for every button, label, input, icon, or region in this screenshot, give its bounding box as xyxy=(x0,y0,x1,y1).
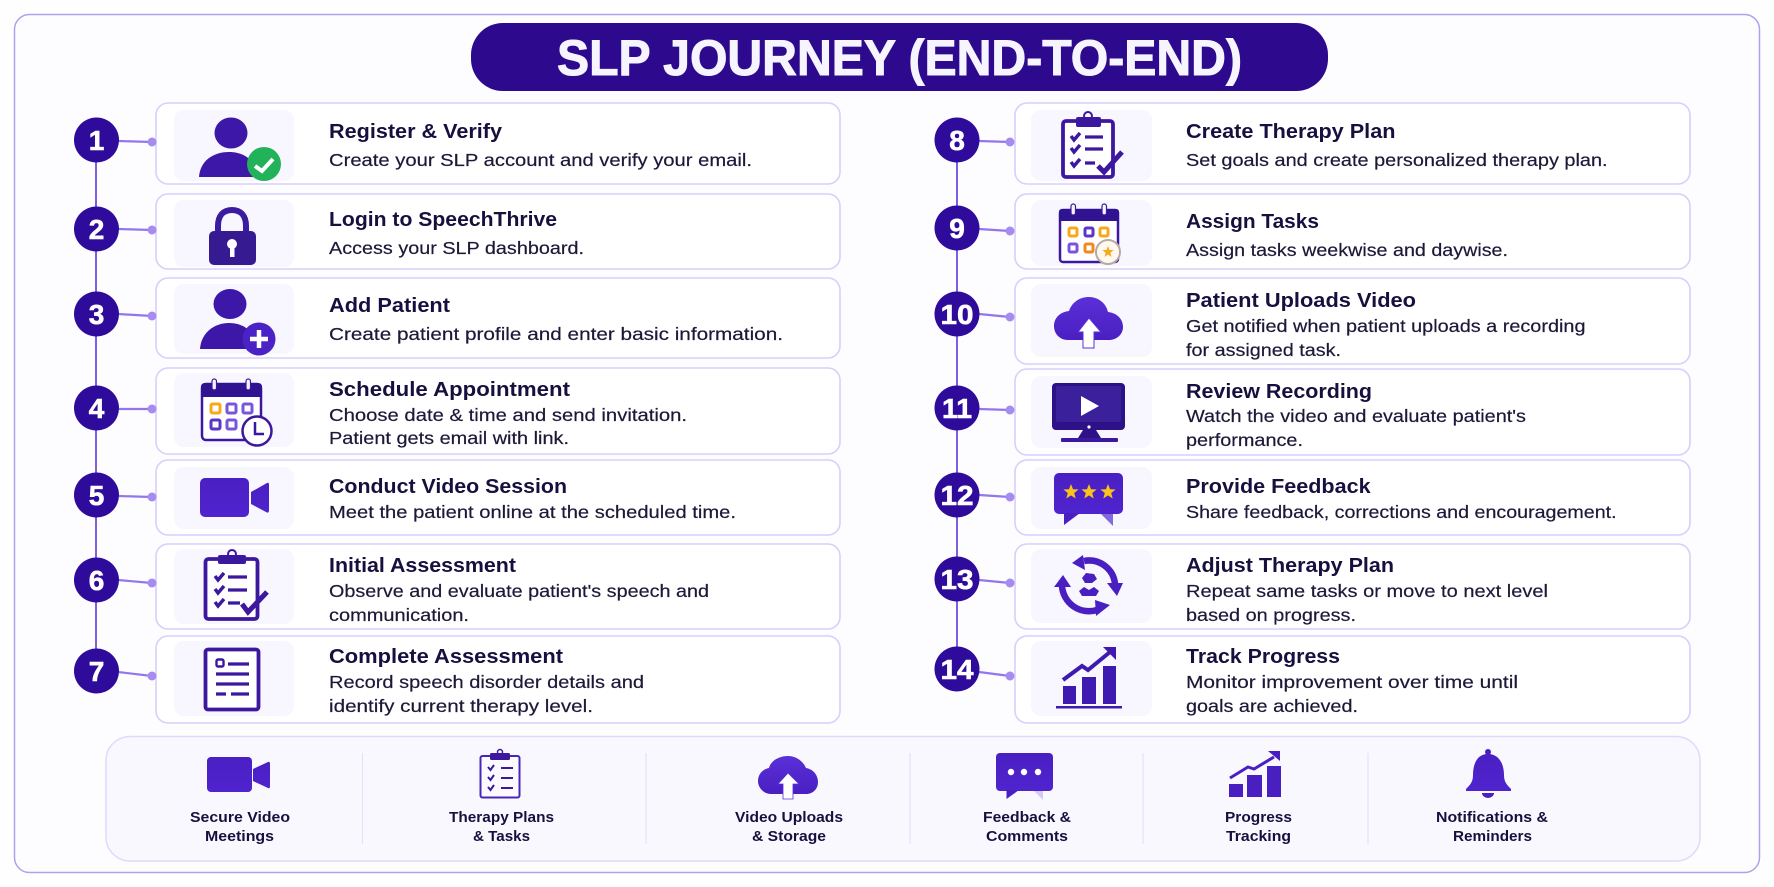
step 11: review recording: 11 xyxy=(942,393,972,424)
step 10: patient uploads video: 10 xyxy=(940,299,974,330)
icon: clipboard checklist xyxy=(206,550,267,619)
step 4: schedule appointment: Patient gets email with link. xyxy=(329,428,569,448)
step 2: login: 2 xyxy=(89,214,104,245)
step 6: initial assessment xyxy=(74,544,840,629)
step 13: adjust therapy plan: based on progress. xyxy=(1186,605,1356,625)
feature: therapy plans and tasks: & Tasks xyxy=(473,829,530,845)
step 12: provide feedback: Provide Feedback xyxy=(1186,476,1372,498)
feature: progress tracking: Tracking xyxy=(1226,829,1291,845)
step 9: assign tasks: 9 xyxy=(949,213,965,244)
feature: notifications and reminders xyxy=(1436,749,1549,845)
step 10: patient uploads video: Get notified when patient uploads a recording xyxy=(1186,316,1586,336)
step 2: login: Login to SpeechThrive xyxy=(329,209,557,231)
step 3: add patient: Create patient profile and enter basic information. xyxy=(329,324,783,344)
step 9: assign tasks xyxy=(934,194,1690,269)
step 13: adjust therapy plan: Repeat same tasks or move to next level xyxy=(1186,581,1548,601)
feature: progress tracking xyxy=(1225,751,1292,845)
step 1: register and verify xyxy=(74,103,840,184)
feature: video uploads and storage xyxy=(735,756,843,845)
icon: monitor play xyxy=(1052,383,1125,442)
icon: growth chart xyxy=(1056,647,1122,708)
step 8: create therapy plan: Set goals and create personalized therapy plan. xyxy=(1186,150,1608,170)
step 13: adjust therapy plan: 13 xyxy=(940,564,974,595)
step 3: add patient: 3 xyxy=(89,299,104,330)
step 4: schedule appointment: Choose date & time and send invitation. xyxy=(329,405,687,425)
step 1: register and verify: Create your SLP account and verify your email. xyxy=(329,150,752,170)
step 11: review recording: Watch the video and evaluate patient's xyxy=(1186,406,1526,426)
timeline: right spine xyxy=(956,140,958,669)
step 12: provide feedback xyxy=(934,460,1690,535)
step 10: patient uploads video: Patient Uploads Video xyxy=(1186,290,1416,312)
step 13: adjust therapy plan: Adjust Therapy Plan xyxy=(1186,555,1394,577)
icon: calendar with star xyxy=(1059,204,1120,264)
icon: clipboard checklist xyxy=(1063,112,1122,177)
feature: video uploads and storage: Video Uploads xyxy=(735,810,843,826)
step 13: adjust therapy plan xyxy=(934,544,1690,629)
step 8: create therapy plan: Create Therapy Plan xyxy=(1186,121,1396,143)
step 5: conduct video session: Conduct Video Session xyxy=(329,476,567,498)
panel: platform features xyxy=(106,736,1700,861)
step 7: complete assessment: Complete Assessment xyxy=(329,646,563,668)
feature: notifications and reminders: Reminders xyxy=(1453,829,1532,845)
icon: cycle arrows xyxy=(1054,555,1123,616)
step 11: review recording: performance. xyxy=(1186,430,1303,450)
title: SLP JOURNEY (END-TO-END) xyxy=(557,30,1242,86)
icon: add user xyxy=(200,289,276,356)
step 7: complete assessment: identify current therapy level. xyxy=(329,696,593,716)
icon: padlock xyxy=(209,210,256,265)
step 11: review recording xyxy=(934,369,1690,455)
icon: calendar with clock xyxy=(201,379,272,446)
step 4: schedule appointment xyxy=(74,368,840,454)
feature: feedback and comments: Comments xyxy=(986,829,1068,845)
feature: therapy plans and tasks xyxy=(449,750,554,845)
step 6: initial assessment: Initial Assessment xyxy=(329,555,516,577)
step 8: create therapy plan xyxy=(934,103,1690,184)
feature: video uploads and storage: & Storage xyxy=(752,829,826,845)
step 14: track progress: Monitor improvement over time until xyxy=(1186,672,1518,692)
step 6: initial assessment: communication. xyxy=(329,605,469,625)
step 11: review recording: Review Recording xyxy=(1186,381,1372,403)
feature: feedback and comments xyxy=(983,753,1072,845)
feature: feedback and comments: Feedback & xyxy=(983,810,1072,826)
step 4: schedule appointment: 4 xyxy=(89,393,105,424)
step 10: patient uploads video: for assigned task. xyxy=(1186,340,1341,360)
feature: secure video meetings: Secure Video xyxy=(190,810,290,826)
feature: notifications and reminders: Notifications & xyxy=(1436,810,1549,826)
icon: rating bubble xyxy=(1054,473,1123,526)
step 7: complete assessment: 7 xyxy=(89,656,104,687)
feature: progress tracking: Progress xyxy=(1225,810,1292,826)
feature: secure video meetings xyxy=(190,757,290,845)
step 14: track progress: 14 xyxy=(940,654,974,685)
step 2: login xyxy=(74,194,840,269)
icon: cloud upload xyxy=(1054,297,1123,348)
icon: document xyxy=(206,650,258,710)
step 5: conduct video session: 5 xyxy=(89,480,104,511)
feature: secure video meetings: Meetings xyxy=(205,829,274,845)
step 4: schedule appointment: Schedule Appointment xyxy=(329,379,570,401)
step 6: initial assessment: 6 xyxy=(89,565,104,596)
step 3: add patient xyxy=(74,278,840,358)
icon: verified user xyxy=(199,118,281,181)
step 7: complete assessment xyxy=(74,636,840,723)
step 14: track progress xyxy=(934,636,1690,723)
title xyxy=(471,23,1328,91)
step 14: track progress: goals are achieved. xyxy=(1186,696,1358,716)
step 9: assign tasks: Assign Tasks xyxy=(1186,211,1319,233)
step 14: track progress: Track Progress xyxy=(1186,646,1340,668)
step 12: provide feedback: Share feedback, corrections and encouragement. xyxy=(1186,502,1617,522)
step 12: provide feedback: 12 xyxy=(940,480,974,511)
step 7: complete assessment: Record speech disorder details and xyxy=(329,672,644,692)
icon: video camera xyxy=(200,478,269,517)
step 1: register and verify: Register & Verify xyxy=(329,121,503,143)
step 6: initial assessment: Observe and evaluate patient's speech and xyxy=(329,581,709,601)
step 1: register and verify: 1 xyxy=(89,125,104,156)
feature: therapy plans and tasks: Therapy Plans xyxy=(449,810,554,826)
step 10: patient uploads video xyxy=(934,278,1690,364)
step 8: create therapy plan: 8 xyxy=(949,125,965,156)
step 2: login: Access your SLP dashboard. xyxy=(329,238,584,258)
step 9: assign tasks: Assign tasks weekwise and daywise. xyxy=(1186,240,1508,260)
step 3: add patient: Add Patient xyxy=(329,295,450,317)
timeline: left spine xyxy=(95,140,97,671)
step 5: conduct video session xyxy=(74,460,840,535)
step 5: conduct video session: Meet the patient online at the scheduled time. xyxy=(329,502,736,522)
